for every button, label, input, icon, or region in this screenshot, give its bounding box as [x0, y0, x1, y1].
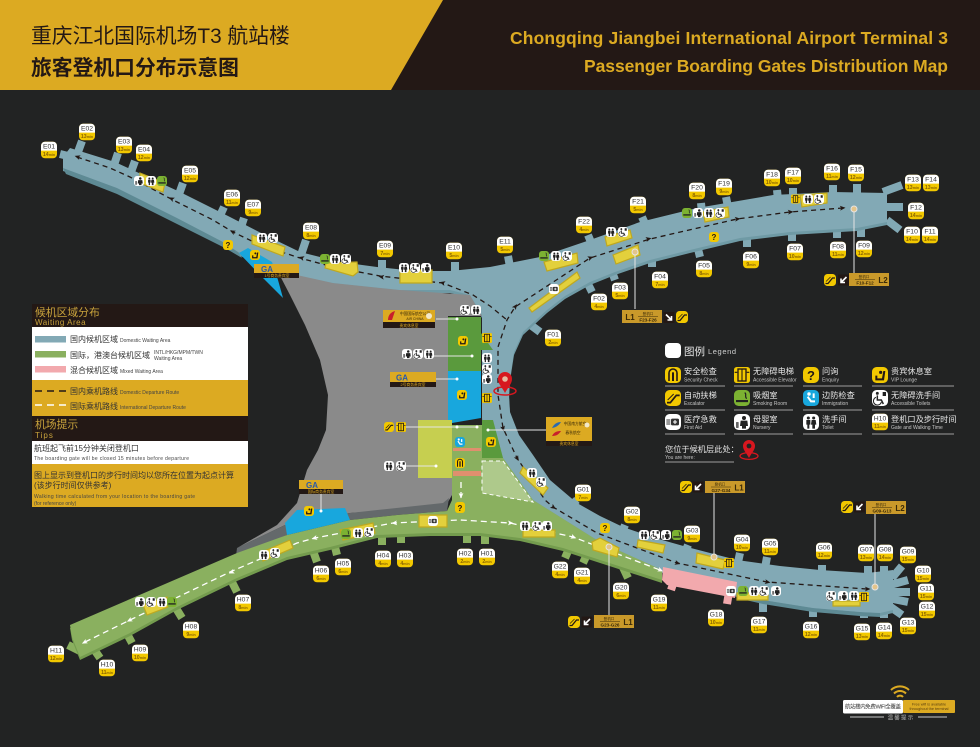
- subtitle chinese: 旅客登机口分布示意图: [31, 56, 239, 80]
- lounge sign: Air China: 贵宾休息室: [400, 323, 419, 328]
- gates E: E03: [118, 138, 130, 146]
- legend immigration: [803, 390, 855, 407]
- enquiry icons: ?: [226, 241, 231, 250]
- legend domestic route: [35, 386, 179, 396]
- legend smoking: Smoking Room: [753, 401, 787, 407]
- gates G: G01: [577, 486, 590, 494]
- gates G: 9min: [687, 536, 697, 542]
- lounge sign: GA international: [299, 480, 343, 494]
- tip walking time: (for reference only): [34, 501, 77, 507]
- gates F: 4min: [579, 227, 589, 233]
- you are here pin on map: [494, 372, 516, 395]
- gates F: 12min: [858, 251, 870, 257]
- legend nursery: Nursery: [753, 425, 771, 431]
- gates H: H05: [337, 560, 349, 568]
- gates G: 13min: [856, 634, 868, 640]
- legend heading: 图例: [684, 345, 705, 358]
- lounge sign: Air China: 中国国际航空公司: [400, 311, 430, 316]
- gates F: F17: [787, 170, 799, 176]
- gate group sign G09-G13 L2: G09-G13: [873, 508, 892, 514]
- gates F: F22: [578, 218, 590, 226]
- gates G: 15min: [917, 576, 929, 582]
- enquiry icons: [223, 232, 719, 533]
- gates E: E01: [43, 144, 55, 150]
- gates G: 10min: [736, 545, 748, 551]
- gates E: 12min: [184, 176, 196, 182]
- tip walking time: Walking time calculated from your location to the boarding gate: [34, 494, 195, 500]
- kiosk blocks: [140, 173, 860, 615]
- gate group sign G09-G13 L2: [841, 501, 906, 514]
- legend accessible toilet: Accessible Toilets: [891, 401, 931, 407]
- gates F: 7min: [655, 282, 665, 288]
- gates F: 11min: [826, 174, 838, 180]
- legend enquiry: [803, 366, 839, 384]
- subtitle english: Passenger Boarding Gates Distribution Map: [584, 56, 948, 76]
- gates H: H10: [101, 662, 113, 668]
- legend immigration: Immigration: [822, 401, 848, 407]
- legend enquiry: 问询: [822, 366, 838, 376]
- white route arrows: [81, 493, 664, 646]
- gates F: 8min: [699, 271, 709, 277]
- legend first aid: [665, 414, 717, 431]
- gate group sign F10-F12 L2: 登机口: [859, 274, 870, 279]
- gates F: 5min: [633, 207, 643, 213]
- gates E: [41, 124, 513, 259]
- lounge sign: China Southern / China Eastern: 春秋航空: [565, 430, 581, 435]
- gates G: G17: [753, 618, 766, 626]
- gates E: E04: [138, 146, 150, 154]
- gates G: G12: [921, 604, 934, 610]
- gate group sign F23-F26 L1: F23-F26: [639, 318, 657, 322]
- legend international route: International Departure Route: [120, 405, 186, 411]
- tip walking time: (该步行时间仅供参考): [34, 480, 112, 490]
- gates H: 6min: [338, 569, 348, 575]
- gates F: 10min: [787, 178, 799, 184]
- gates E: 7min: [380, 251, 390, 257]
- legend you are here: You are here:: [665, 455, 695, 461]
- gates G: G03: [686, 528, 699, 534]
- gate group sign F23-F26 L1: [622, 310, 688, 323]
- legend elevator: 无障碍电梯: [753, 366, 794, 376]
- swatch international: Waiting Area: [154, 356, 182, 362]
- legend accessible toilet: 无障碍洗手间: [891, 390, 940, 400]
- green lounge right: [482, 420, 503, 458]
- gate group sign G23-G26 L1 south: L1: [623, 618, 633, 627]
- vip blue area west: [239, 248, 283, 298]
- gates F: F13: [907, 176, 919, 184]
- gates G: 11min: [653, 605, 665, 611]
- gates G: G16: [805, 624, 818, 630]
- gates G: G19: [653, 596, 666, 604]
- grey building edge: [236, 498, 449, 556]
- gate group sign F10-F12 L2: F10-F12: [856, 280, 874, 286]
- gates G: G08: [879, 546, 892, 554]
- lounge sign: GA international: 国际商务贵宾室: [308, 489, 334, 494]
- title english: Chongqing Jiangbei International Airport Terminal 3: [510, 28, 948, 48]
- tips heading: Tips: [35, 431, 54, 440]
- green concourse shaded edge: [70, 428, 662, 660]
- legend enquiry: ?: [807, 368, 815, 383]
- waiting area heading: [35, 305, 100, 327]
- gates G: 15min: [902, 628, 914, 634]
- gates F: F21: [632, 198, 644, 206]
- gates F: 9min: [719, 189, 729, 195]
- vip blue area south: [285, 508, 350, 535]
- gates E: E09: [379, 242, 391, 250]
- panel: waiting area and tips: [32, 304, 248, 507]
- lounge sign: GA 2: [390, 372, 436, 387]
- gate group sign G27-G34 L1 north: G27-G34: [712, 488, 731, 493]
- gates F: F03: [614, 284, 626, 292]
- gates G: G15: [856, 626, 869, 632]
- gates F: F08: [832, 244, 844, 250]
- lounge sign: GA 1: [254, 264, 299, 278]
- gates F: 13min: [925, 185, 937, 191]
- gate group sign G09-G13 L2: L2: [895, 504, 905, 513]
- gates E: 5min: [500, 247, 510, 253]
- gates G: 11min: [764, 549, 776, 555]
- legend heading: [665, 343, 737, 358]
- gates H: 2min: [460, 559, 470, 565]
- wifi notice: [843, 686, 955, 722]
- lounge sign: Air China: AIR CHINA: [406, 317, 424, 321]
- gates G: 11min: [753, 627, 765, 633]
- gates H: H08: [185, 624, 197, 630]
- gates H: H11: [50, 648, 62, 654]
- legend escalator: Escalator: [684, 401, 705, 407]
- gates F: F01: [547, 332, 559, 338]
- gates E: 9min: [248, 210, 258, 216]
- swatch international: INTL/HKG/MPM/TWN: [154, 350, 203, 356]
- legend domestic route: Domestic Departure Route: [120, 390, 179, 396]
- gates G: 4min: [555, 572, 565, 578]
- gate group sign F23-F26 L1: 登机口: [643, 311, 654, 316]
- tip walking time: [34, 470, 234, 507]
- gates E: E06: [226, 192, 238, 198]
- gates H: [48, 549, 495, 676]
- gate stubs blue: [60, 141, 910, 618]
- gates F: 14min: [910, 213, 922, 219]
- legend toilet: [803, 414, 847, 431]
- international waiting area green concourse: [70, 425, 662, 657]
- international departure routes: [81, 482, 664, 646]
- header band: [0, 0, 980, 90]
- terminal map base: [60, 141, 910, 660]
- icon: wifi: [891, 686, 909, 697]
- gates G: G07: [860, 546, 873, 554]
- legend international route: [35, 401, 186, 411]
- gate group sign F10-F12 L2: L2: [878, 276, 888, 285]
- gates F: 14min: [906, 237, 918, 243]
- gate group sign G23-G26 L1 south: 登机口: [604, 616, 615, 621]
- tip boarding gate closing: [34, 443, 189, 462]
- gates H: H01: [481, 550, 493, 558]
- legend elevator: [734, 366, 797, 384]
- legend security: Security Check: [684, 378, 718, 384]
- gates F: F05: [698, 262, 710, 270]
- lounge sign: GA 1: GA: [261, 265, 273, 274]
- gates F: F16: [826, 166, 838, 172]
- gates G: G14: [878, 624, 891, 632]
- lounge sign: GA international: GA: [306, 481, 318, 490]
- tips heading: 机场提示: [35, 417, 78, 431]
- enquiry icons: ?: [712, 233, 717, 242]
- panel: legend: [665, 343, 957, 462]
- enquiry icons: ?: [458, 504, 463, 513]
- gates F: 9min: [746, 262, 756, 268]
- gates F: 10min: [766, 180, 778, 186]
- legend enquiry: Enquiry: [822, 378, 839, 384]
- legend gate and walking time: Gate and Walking Time: [891, 425, 943, 431]
- gates G: 15min: [921, 612, 933, 618]
- legend first aid: First Aid: [684, 425, 702, 431]
- gates H: 10min: [134, 655, 146, 661]
- wifi notice: 温馨提示: [888, 714, 914, 722]
- title chinese: 重庆江北国际机场T3 航站楼: [31, 25, 290, 48]
- gates F: F02: [593, 296, 605, 302]
- gate group sign G23-G26 L1 south: [568, 615, 634, 628]
- legend immigration: 边防检查: [822, 390, 855, 400]
- gates H: H02: [459, 550, 471, 558]
- legend escalator: [665, 390, 717, 407]
- blue lounge: [448, 371, 481, 423]
- gates G: [552, 485, 935, 640]
- swatch mixed: [35, 365, 163, 375]
- gate stubs green: [68, 530, 628, 658]
- gate group sign G23-G26 L1 south: G23-G26: [601, 622, 620, 628]
- gates G: G09: [902, 548, 915, 556]
- lounge sign: China Southern / China Eastern: 贵宾休息室: [560, 441, 579, 446]
- gates H: 2min: [482, 559, 492, 565]
- gates F: F18: [766, 172, 778, 178]
- legend escalator: 自动扶梯: [684, 390, 717, 400]
- gates G: G02: [626, 508, 639, 516]
- tips heading: [35, 417, 78, 440]
- gates G: G18: [710, 612, 723, 618]
- lounge sign: Air China: [383, 310, 435, 328]
- dark green lounge: [448, 317, 493, 371]
- gate group sign G27-G34 L1 north: 登机口: [715, 482, 726, 486]
- light green zone with dashed border: [482, 461, 533, 502]
- location markers: [606, 206, 878, 590]
- enquiry icons: ?: [603, 524, 608, 533]
- legend vip: 贵宾休息室: [891, 366, 932, 376]
- waiting area heading: 候机区域分布: [35, 305, 100, 319]
- swatch domestic: 国内候机区域: [70, 334, 118, 344]
- gates H: 11min: [101, 670, 113, 676]
- facility icons on map: [134, 176, 869, 607]
- south concourse shaded edge: [737, 594, 880, 617]
- gates E: 13min: [81, 134, 93, 140]
- gate group sign F10-F12 L2: [824, 273, 889, 286]
- gates H: H04: [377, 552, 389, 560]
- leader lines: [320, 206, 878, 615]
- swatch mixed: 混合候机区域: [70, 365, 118, 375]
- gates G: 8min: [627, 517, 637, 523]
- swatch domestic: [35, 334, 171, 344]
- lounge sign: GA 1: 1号商务贵宾室: [265, 273, 290, 278]
- salmon stripes: [453, 448, 481, 476]
- gates E: E05: [184, 168, 196, 174]
- gates H: 4min: [378, 561, 388, 567]
- gates G: 14min: [879, 555, 891, 561]
- gates G: 10min: [710, 620, 722, 626]
- gates H: 9min: [186, 632, 196, 638]
- gates F: F20: [691, 184, 703, 192]
- gates F: F15: [850, 166, 862, 174]
- gates G: 12min: [805, 632, 817, 638]
- gates G: 15min: [920, 594, 932, 600]
- gates F: F11: [924, 228, 936, 236]
- wifi notice: Free wifi is available: [912, 702, 946, 706]
- gates G: G06: [818, 544, 831, 552]
- gate group sign G09-G13 L2: 登机口: [876, 502, 887, 507]
- gates G: G21: [576, 570, 589, 576]
- gates H: 4min: [400, 561, 410, 567]
- gates F: F07: [789, 246, 801, 252]
- gates E: E07: [247, 202, 259, 208]
- gates F: 10min: [789, 254, 801, 260]
- gates E: 11min: [226, 200, 238, 206]
- legend accessible toilet: [872, 390, 940, 407]
- legend toilet: Toilet: [822, 425, 834, 431]
- gates G: G04: [736, 536, 749, 544]
- tip boarding gate closing: 航班起飞前15分钟关闭登机口: [34, 443, 139, 453]
- legend smoking: 吸烟室: [753, 390, 778, 400]
- swatch international: [35, 350, 203, 362]
- gates E: 13min: [118, 147, 130, 153]
- gates E: E11: [499, 238, 511, 246]
- gates H: H07: [237, 596, 249, 604]
- domestic departure routes: [74, 154, 870, 591]
- gates H: H09: [134, 646, 146, 654]
- gates G: G05: [764, 540, 777, 548]
- lime block: [418, 420, 452, 478]
- gates F: 13min: [907, 185, 919, 191]
- gate stubs pink: [671, 578, 729, 604]
- gates H: H03: [399, 552, 411, 560]
- swatch mixed: Mixed Waiting Area: [120, 369, 163, 375]
- grey apron area: [237, 270, 482, 548]
- waiting area heading: Waiting Area: [35, 318, 86, 327]
- gates E: E10: [448, 244, 460, 252]
- gates F: 2min: [548, 340, 558, 346]
- gate group sign G27-G34 L1 north: [680, 481, 745, 493]
- gates G: 4min: [577, 578, 587, 584]
- gates F: F10: [906, 228, 918, 236]
- lounge sign: China Southern / China Eastern: [546, 417, 592, 446]
- gates F: F06: [745, 254, 757, 260]
- legend elevator: Accessible Elevator: [753, 378, 797, 384]
- east concourse shaded edge: [63, 168, 242, 258]
- legend gate and walking time: H10: [874, 416, 886, 422]
- gates F: F09: [858, 242, 870, 250]
- legend heading: Legend: [708, 347, 737, 356]
- tip boarding gate closing: The boarding gate will be closed 15 minutes before departure: [34, 456, 189, 462]
- gates E: 12min: [138, 155, 150, 161]
- gates H: H06: [315, 568, 327, 574]
- legend security: [665, 366, 718, 384]
- legend nursery: [734, 414, 778, 431]
- gates F: [545, 164, 939, 346]
- legend you are here: [665, 440, 758, 461]
- legend first aid: 医疗急救: [684, 414, 717, 424]
- legend smoking: [734, 390, 787, 407]
- gates F: F14: [925, 176, 937, 184]
- gates F: 12min: [850, 175, 862, 181]
- gates F: F12: [910, 204, 922, 212]
- gates E: 8min: [306, 233, 316, 239]
- gates H: 12min: [50, 656, 62, 662]
- gates G: G10: [917, 568, 930, 574]
- legend domestic route: 国内乘机路线: [70, 386, 118, 396]
- domestic waiting area blue concourse: [63, 148, 893, 613]
- legend gate and walking time: 登机口及步行时间: [891, 414, 957, 424]
- lounge sign: GA 2: GA: [396, 374, 408, 382]
- gates E: E08: [305, 224, 317, 232]
- gates F: 14min: [924, 237, 936, 243]
- legend security: 安全检查: [684, 366, 717, 376]
- legend gate and walking time: [872, 414, 957, 431]
- gates F: F04: [654, 274, 666, 280]
- gate group sign F23-F26 L1: L1: [625, 313, 635, 322]
- legend gate and walking time: 11min: [874, 424, 886, 430]
- gates E: E02: [81, 126, 93, 132]
- gates F: 8min: [692, 193, 702, 199]
- gates F: 5min: [615, 293, 625, 299]
- route arrows: [74, 154, 870, 591]
- swatch international: 国际，港澳台候机区域: [70, 350, 150, 360]
- lounge sign: GA 2: 2号商务贵宾室: [401, 382, 426, 387]
- gate group sign G27-G34 L1 north: L1: [734, 484, 744, 492]
- gates H: 6min: [316, 576, 326, 582]
- gates F: 11min: [832, 252, 844, 258]
- gates G: 7min: [578, 495, 588, 501]
- wifi notice: throughout the terminal: [909, 707, 949, 711]
- gates G: G13: [902, 620, 915, 626]
- gates G: 6min: [616, 593, 626, 599]
- legend vip: VIP Lounge: [891, 378, 917, 384]
- gates G: 14min: [878, 633, 890, 639]
- concourse shaded edge: [63, 151, 893, 616]
- legend you are here: 您位于候机层此处：: [665, 444, 739, 454]
- legend toilet: 洗手间: [822, 414, 847, 424]
- gates E: 14min: [43, 152, 55, 158]
- swatch domestic: Domestic Waiting Area: [120, 338, 171, 344]
- gates F: F19: [718, 180, 730, 188]
- legend vip: [872, 366, 932, 384]
- mixed waiting area pink: [662, 567, 737, 598]
- gates G: 12min: [818, 553, 830, 559]
- gates G: G22: [554, 564, 567, 570]
- legend nursery: 母婴室: [753, 414, 778, 424]
- gates F: 4min: [594, 304, 604, 310]
- legend international route: 国际乘机路线: [70, 401, 118, 411]
- gates H: 8min: [238, 605, 248, 611]
- gates G: 15min: [902, 557, 914, 563]
- gates E: 5min: [449, 253, 459, 259]
- wifi notice: 航站楼内免费WIFI全覆盖: [845, 702, 901, 710]
- tip walking time: 图上显示到登机口的步行时间均以您所在位置为起点计算: [34, 470, 234, 480]
- gates G: G20: [615, 584, 628, 592]
- gates G: 13min: [860, 555, 872, 561]
- lounge sign: China Southern / China Eastern: 中国南方航空: [564, 421, 587, 426]
- gates G: G11: [920, 586, 932, 592]
